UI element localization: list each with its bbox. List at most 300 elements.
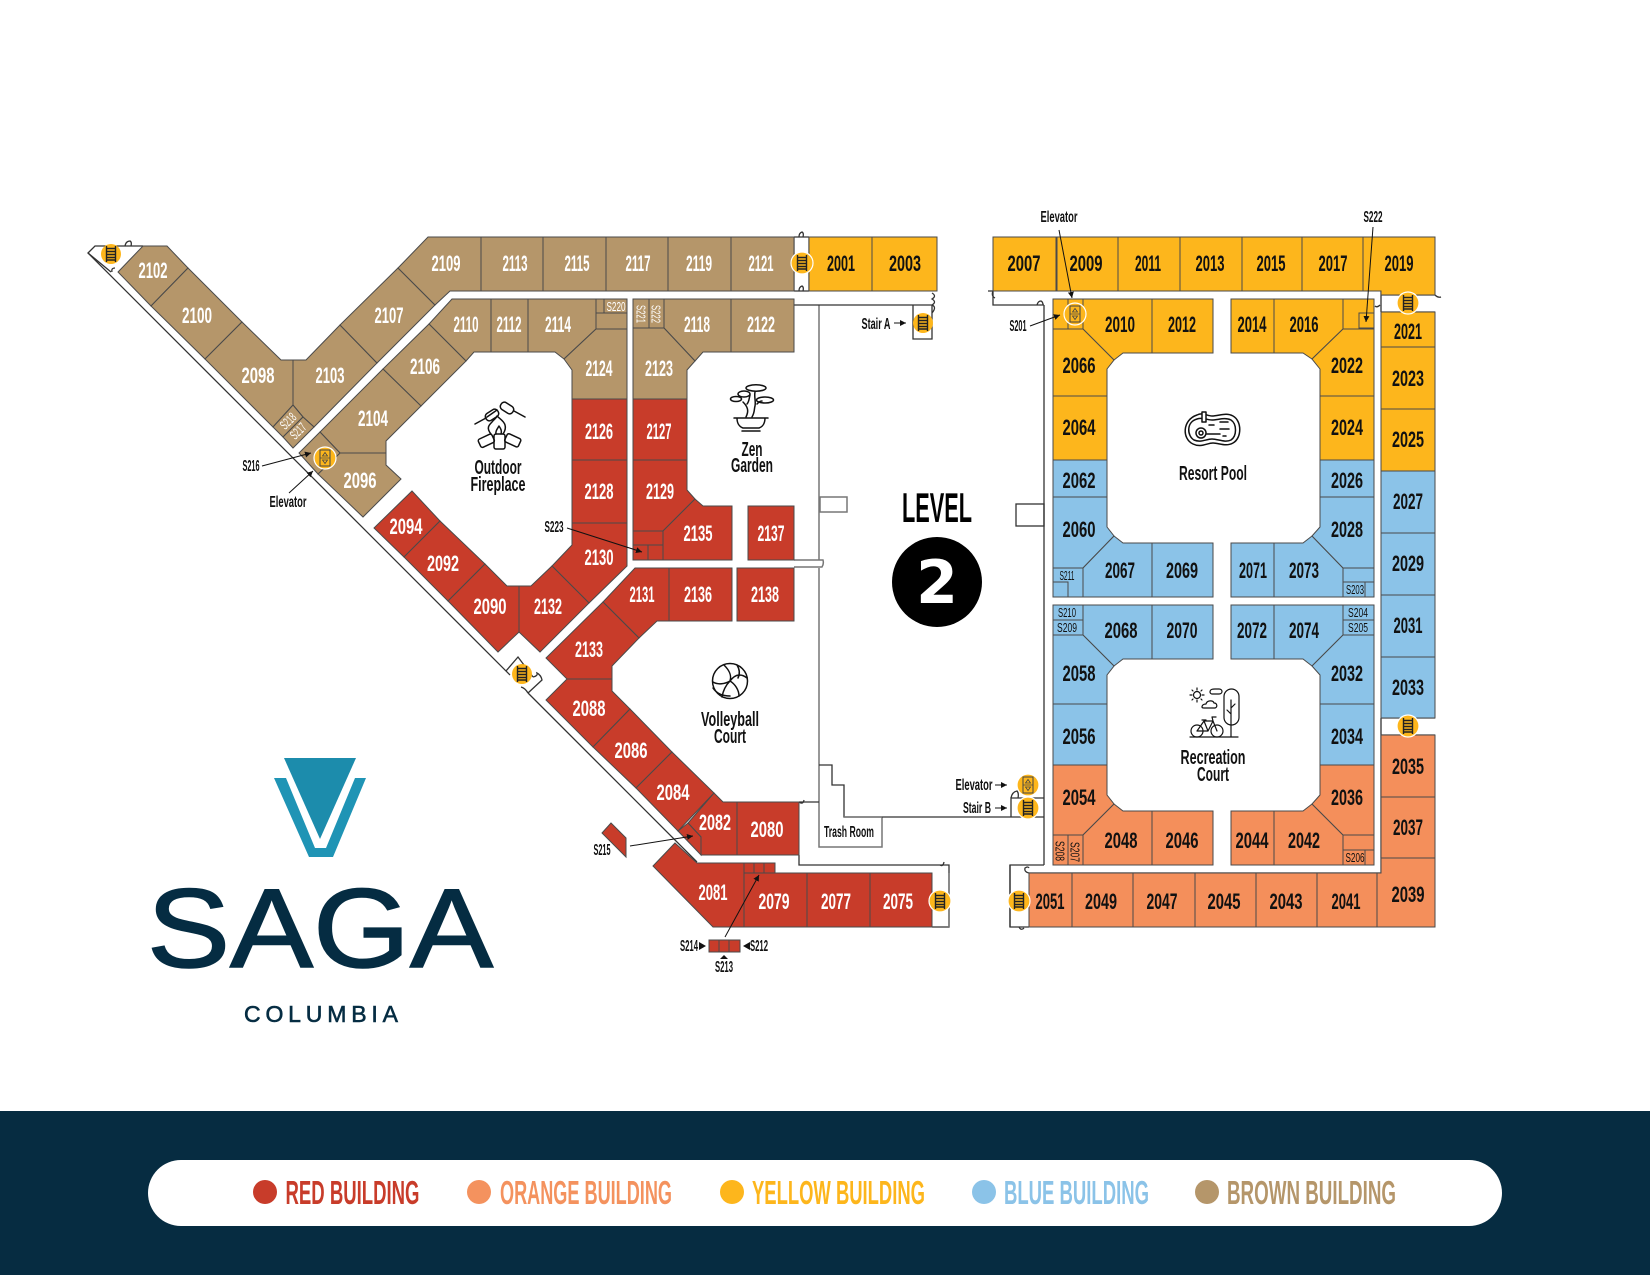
callout S212: [743, 938, 768, 955]
room 2033: 2033: [1392, 675, 1424, 700]
stair icon top left: [101, 244, 121, 264]
room 2019: [1363, 237, 1435, 295]
room 2138: [737, 568, 794, 621]
room 2022: 2022: [1331, 353, 1363, 378]
logo: Saga Columbia: [147, 758, 493, 1027]
room 2138: 2138: [751, 582, 779, 607]
room 2071: [1231, 543, 1274, 597]
storage S216 box: [299, 432, 340, 474]
room 2066: [1053, 329, 1114, 396]
room 2137: [748, 506, 794, 560]
storage S212 to S214 in plan: [744, 863, 775, 873]
room 2126: 2126: [585, 419, 613, 444]
room 2048: 2048: [1104, 828, 1138, 853]
room 2029: [1381, 533, 1435, 595]
room 2129: [633, 460, 695, 531]
stair icon at 2019: [1397, 292, 1419, 314]
room 2044: [1231, 811, 1274, 865]
room 2070: [1152, 605, 1213, 659]
room 2023: 2023: [1392, 366, 1424, 391]
room 2015: 2015: [1256, 251, 1286, 276]
room 2015: [1242, 237, 1302, 291]
room 2124: 2124: [586, 356, 613, 381]
room 2013: [1180, 237, 1242, 291]
room 2028: [1312, 497, 1374, 568]
room 2009: [1057, 237, 1118, 291]
callout S215: S215: [594, 842, 611, 859]
room 2090: 2090: [474, 594, 506, 619]
room 2073: 2073: [1289, 558, 1319, 583]
room 2069: 2069: [1166, 558, 1198, 583]
room 2068: [1083, 605, 1152, 666]
room 2072: [1231, 605, 1274, 659]
corridor nook left: [820, 497, 847, 512]
room 2029: 2029: [1392, 551, 1424, 576]
room 2051: [1029, 873, 1072, 927]
room 2136: [669, 568, 732, 621]
room 2035: 2035: [1392, 754, 1424, 779]
room 2094: 2094: [390, 514, 423, 539]
room 2045: 2045: [1208, 889, 1240, 914]
room 2016: [1274, 299, 1343, 359]
room 2117: 2117: [626, 251, 650, 276]
elevator icon lower: [1017, 774, 1039, 796]
room 2069: [1152, 543, 1213, 597]
room 2113: 2113: [502, 251, 528, 276]
room 2026: [1320, 460, 1374, 497]
room 2109: [398, 237, 481, 305]
room 2046: [1152, 811, 1213, 865]
amenity: recreation court: [1180, 688, 1246, 786]
room 2045: [1195, 873, 1256, 927]
room 2001: 2001: [827, 251, 855, 276]
room 2132: 2132: [534, 594, 562, 619]
detached storage S215: [602, 823, 626, 857]
callout S223: S223: [544, 519, 564, 536]
storage S207: S207: [1068, 842, 1082, 862]
callout S213: [715, 955, 733, 976]
stair icon A: [913, 313, 933, 333]
footer band: [0, 1111, 1650, 1275]
room 2037: 2037: [1393, 815, 1423, 840]
room 2127: 2127: [646, 419, 672, 444]
text: S212: [750, 938, 768, 955]
room 2039: [1377, 858, 1435, 927]
room 2121: 2121: [748, 251, 774, 276]
room 2010: [1083, 299, 1152, 360]
icon: volleyball: [712, 664, 748, 698]
room 2036: [1312, 765, 1374, 835]
room 2010: 2010: [1105, 312, 1135, 337]
legend pill: [148, 1160, 1502, 1226]
storage S223 block: [633, 531, 663, 560]
room 2112: 2112: [496, 312, 522, 337]
room 2104: 2104: [358, 406, 388, 431]
room 2058: 2058: [1062, 661, 1096, 686]
room 2042: 2042: [1288, 828, 1320, 853]
room 2058: [1053, 635, 1114, 704]
callout S215: [594, 836, 693, 859]
room 2014: 2014: [1238, 312, 1267, 337]
callout Stair B: Stair B: [963, 800, 991, 817]
room 2100: [151, 268, 242, 359]
room 2106: [383, 324, 466, 406]
room 2067: 2067: [1105, 558, 1135, 583]
callout S201: [1010, 315, 1060, 335]
orange building rooms: [1029, 735, 1435, 927]
room 2096: [318, 453, 401, 517]
room 2133: [546, 602, 639, 679]
room 2079: 2079: [758, 889, 790, 914]
room 2075: 2075: [883, 889, 913, 914]
room 2136: 2136: [684, 582, 712, 607]
room 2016: 2016: [1290, 312, 1318, 337]
callout S213: S213: [715, 959, 733, 976]
amenity: outdoor fireplace: [470, 401, 526, 496]
room 2054: [1053, 765, 1114, 835]
blue building rooms: [1053, 460, 1435, 765]
room 2073: [1274, 536, 1343, 597]
corridor walls: [88, 232, 1441, 929]
storage S204: S204: [1348, 605, 1368, 620]
callout lower elevator: Elevator: [956, 777, 992, 794]
room 2077: [807, 873, 870, 927]
room 2132: [519, 566, 589, 652]
room 2114: [528, 299, 596, 359]
red building rooms: [374, 399, 932, 952]
room 2043: [1256, 873, 1317, 927]
room 2082: [688, 793, 737, 855]
stair icon at 2121: [791, 252, 813, 274]
arrow to S212 group: [725, 875, 759, 937]
room 2082: 2082: [699, 810, 731, 835]
room 2100: 2100: [182, 303, 212, 328]
room 2032: [1312, 635, 1374, 704]
room 2107: 2107: [374, 303, 404, 328]
room 2071: 2071: [1239, 558, 1267, 583]
callout S222: S222: [1364, 209, 1382, 226]
callout S201: S201: [1010, 318, 1027, 335]
utility box: [596, 313, 627, 329]
room 2080: [737, 802, 799, 855]
room 2012: 2012: [1168, 312, 1196, 337]
room 2098: 2098: [242, 363, 274, 388]
storage S217: S217: [287, 420, 309, 442]
room 2074: 2074: [1289, 618, 1319, 643]
room 2022: [1312, 329, 1374, 396]
storage S215 in plan: [678, 823, 701, 855]
room 2102: [118, 246, 188, 306]
level number badge: 2: [916, 548, 958, 618]
room 2025: [1381, 409, 1435, 471]
room 2062: [1053, 460, 1107, 497]
room 2115: 2115: [564, 251, 590, 276]
room 2047: [1133, 873, 1195, 927]
callout S223: [544, 519, 642, 552]
room 2064: 2064: [1062, 415, 1096, 440]
logo mark: [274, 758, 366, 857]
storage S218: [273, 405, 303, 437]
room 2007: 2007: [1008, 251, 1040, 276]
room 2131: 2131: [630, 582, 654, 607]
amenity: volleyball court: Court: [714, 725, 746, 748]
legend: blue building: [972, 1174, 1149, 1211]
room 2049: 2049: [1085, 889, 1117, 914]
room 2031: [1381, 595, 1435, 657]
storage S218: S218: [277, 410, 299, 432]
room 2128: [572, 460, 627, 523]
room 2133: 2133: [575, 637, 603, 662]
room 2128: 2128: [584, 479, 614, 504]
room 2104: [320, 369, 421, 453]
room 2047: 2047: [1146, 889, 1178, 914]
room 2039: 2039: [1392, 882, 1424, 907]
room 2026: 2026: [1331, 468, 1363, 493]
legend: brown building: BROWN BUILDING: [1227, 1174, 1396, 1211]
elevator icon top: [1064, 303, 1086, 325]
storage S206: [1343, 835, 1374, 865]
icon: campfire: [475, 401, 525, 449]
room 2054: 2054: [1062, 785, 1096, 810]
room 2103: [293, 325, 377, 427]
room 2106: 2106: [410, 354, 440, 379]
legend: red building: RED BUILDING: [286, 1174, 420, 1211]
room 2123: [633, 328, 695, 399]
room 2036: 2036: [1331, 785, 1363, 810]
room 2130: [552, 523, 627, 603]
stair icon mid diagonal: [512, 664, 532, 684]
storage S221: S221: [634, 305, 648, 323]
logo wordmark: SAGA: [147, 866, 493, 991]
callout Stair A: Stair A: [862, 316, 890, 333]
room 2121: [731, 237, 794, 291]
storage S221: [633, 299, 649, 328]
storage S203: [1343, 568, 1374, 597]
room 2088: 2088: [572, 696, 606, 721]
amenity: resort pool: [1179, 412, 1247, 485]
room 2092: 2092: [427, 551, 459, 576]
callout S222: [1364, 209, 1382, 322]
room 2031: 2031: [1394, 613, 1422, 638]
room 2131: [603, 568, 669, 638]
storage S222: [648, 299, 664, 328]
storage S222: S222: [648, 305, 664, 323]
room 2114: 2114: [545, 312, 571, 337]
amenity: volleyball court: Volleyball: [701, 708, 759, 731]
elevator bay: [1068, 299, 1083, 329]
elevator icon left: [314, 447, 336, 469]
room 2075: [870, 873, 932, 927]
logo subtitle: COLUMBIA: [244, 1001, 399, 1027]
amenity: recreation court: Recreation: [1180, 746, 1246, 769]
Trash Room label: Trash Room: [824, 824, 874, 841]
level heading: LEVEL: [902, 484, 972, 531]
callout S216: [242, 453, 311, 475]
icon: pool: [1185, 412, 1240, 446]
room 2081: [653, 843, 744, 927]
room 2009: 2009: [1070, 251, 1102, 276]
amenity: outdoor fireplace: Outdoor: [474, 456, 522, 479]
room 2060: [1053, 497, 1114, 568]
room 2118: [664, 299, 731, 361]
room 2025: 2025: [1392, 427, 1424, 452]
room 2049: [1072, 873, 1133, 927]
room 2080: 2080: [750, 817, 784, 842]
yellow building rooms: [809, 237, 1435, 471]
room 2098: [205, 322, 293, 427]
room 2135: 2135: [684, 521, 712, 546]
room 2024: [1320, 396, 1374, 460]
storage S208: [1052, 835, 1068, 865]
room 2115: [543, 237, 606, 291]
room 2068: 2068: [1104, 618, 1138, 643]
amenity: zen garden: Zen: [742, 438, 762, 461]
room 2090: [448, 564, 519, 652]
room 2117: [606, 237, 668, 291]
room 2048: [1083, 804, 1152, 865]
room 2112: [491, 299, 528, 352]
storage S205: S205: [1348, 620, 1368, 635]
brown building rooms: [118, 237, 794, 517]
storage S203: S203: [1346, 582, 1364, 597]
room 2094: [374, 491, 440, 557]
room 2046: 2046: [1166, 828, 1198, 853]
storage S222 box: [1343, 299, 1374, 329]
room 2007: [993, 237, 1056, 291]
room 2119: 2119: [686, 251, 712, 276]
room 2003: [872, 237, 937, 291]
room 2123: 2123: [645, 356, 673, 381]
room 2001: [809, 237, 872, 291]
room 2127: [633, 399, 687, 460]
room 2074: [1274, 605, 1343, 666]
room 2086: [593, 709, 672, 788]
amenity: resort pool: Resort Pool: [1179, 462, 1247, 485]
room 2017: 2017: [1318, 251, 1348, 276]
room 2035: [1381, 735, 1435, 797]
room 2034: [1320, 704, 1374, 765]
room 2041: 2041: [1332, 889, 1360, 914]
room 2060: 2060: [1062, 517, 1096, 542]
legend: yellow building: YELLOW BUILDING: [752, 1174, 925, 1211]
room 2011: [1118, 237, 1180, 291]
stair icon at 2051: [1008, 890, 1030, 912]
room 2070: 2070: [1166, 618, 1198, 643]
room 2012: [1152, 299, 1213, 353]
callout S216: S216: [242, 458, 260, 475]
amenity: volleyball court: [701, 664, 759, 748]
room 2033: [1381, 657, 1435, 718]
storage S207: [1068, 835, 1083, 865]
room 2079: [744, 873, 807, 927]
room 2119: [668, 237, 731, 291]
room 2110: 2110: [454, 312, 478, 337]
room 2042: [1274, 804, 1343, 865]
room 2034: 2034: [1331, 724, 1363, 749]
storage S211: S211: [1060, 568, 1074, 583]
legend: orange building: [467, 1174, 672, 1211]
room 2129: 2129: [646, 479, 674, 504]
storage S209: S209: [1057, 620, 1077, 635]
room 2122: 2122: [747, 312, 775, 337]
room 2003: 2003: [889, 251, 921, 276]
icon: bonsai: [730, 385, 774, 431]
room 2110: [429, 299, 491, 361]
callout top elevator: [1040, 209, 1078, 298]
room 2130: 2130: [584, 545, 614, 570]
room 2088: [546, 679, 630, 747]
room 2113: [481, 237, 543, 291]
room 2056: [1053, 704, 1107, 765]
room 2124: [564, 329, 627, 399]
storage S206: S206: [1346, 850, 1364, 865]
room 2084: [636, 752, 714, 831]
room 2028: 2028: [1331, 517, 1363, 542]
storage S201 box: [1053, 299, 1068, 329]
legend: yellow building: [720, 1174, 925, 1211]
legend: brown building: [1195, 1174, 1396, 1211]
room 2027: [1381, 471, 1435, 533]
room 2051: 2051: [1036, 889, 1064, 914]
room 2056: 2056: [1062, 724, 1096, 749]
storage S220: [596, 299, 627, 314]
room 2064: [1053, 396, 1107, 460]
room 2103: 2103: [316, 363, 344, 388]
stair icon at 2033: [1397, 715, 1419, 737]
room 2011: 2011: [1135, 251, 1161, 276]
room 2021: [1381, 312, 1435, 347]
corridor nook right: [1016, 504, 1044, 526]
room 2043: 2043: [1270, 889, 1302, 914]
amenity: zen garden: Garden: [731, 454, 773, 477]
room 2013: 2013: [1196, 251, 1224, 276]
room 2032: 2032: [1331, 661, 1363, 686]
storage S210: S210: [1058, 605, 1076, 620]
room 2126: [572, 399, 627, 460]
room 2037: [1381, 797, 1435, 858]
room 2102: 2102: [138, 258, 168, 283]
room 2109: 2109: [432, 251, 460, 276]
stair icon B: [1017, 797, 1039, 819]
storage S208: S208: [1052, 841, 1068, 861]
level number badge: [892, 537, 982, 627]
callout left elevator: [270, 471, 313, 511]
stair icon at 2075: [929, 890, 951, 912]
room 2017: [1302, 237, 1363, 291]
icon: bicycle and tree: [1190, 688, 1239, 737]
room 2044: 2044: [1236, 828, 1269, 853]
storage S217: [283, 417, 314, 448]
callout S214: S214: [680, 938, 698, 955]
room 2084: 2084: [656, 780, 690, 805]
room 2077: 2077: [821, 889, 851, 914]
detached storage S212 S213 S214: [709, 940, 740, 952]
callout left elevator: Elevator: [270, 494, 306, 511]
room 2137: 2137: [758, 521, 784, 546]
room 2122: [731, 299, 794, 352]
room 2067: [1083, 536, 1152, 597]
storage S211: [1053, 568, 1083, 597]
room 2023: [1381, 347, 1435, 409]
legend: orange building: ORANGE BUILDING: [500, 1174, 672, 1211]
room 2092: [404, 521, 485, 601]
room 2041: [1317, 873, 1377, 927]
room 2024: 2024: [1331, 415, 1363, 440]
legend: blue building: BLUE BUILDING: [1004, 1174, 1149, 1211]
room 2096: 2096: [344, 468, 376, 493]
legend: red building: [253, 1174, 420, 1211]
room 2086: 2086: [614, 738, 648, 763]
